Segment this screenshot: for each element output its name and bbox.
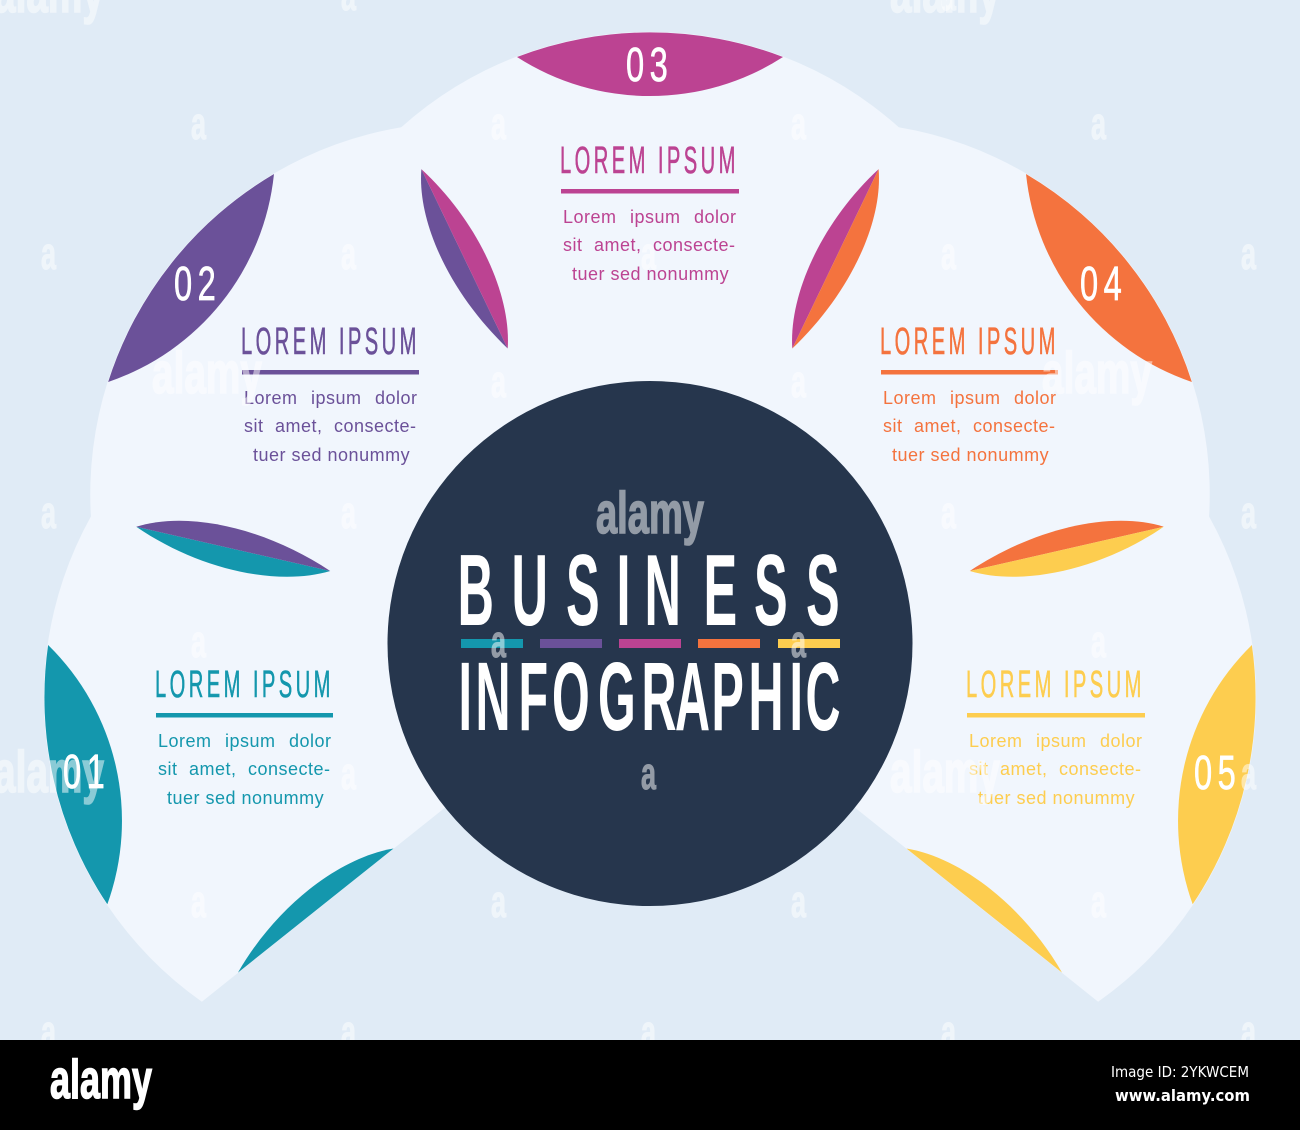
body text 02: amet, (275, 416, 323, 436)
watermarks: a (791, 876, 807, 927)
rule 02 (242, 370, 419, 374)
leaf: purple and magenta (403, 160, 526, 357)
body text 02: ipsum (311, 388, 362, 408)
watermarks: a (191, 98, 207, 149)
panel: step 05 (595, 401, 1300, 1023)
body text 03: sit (563, 235, 582, 255)
body text 05: sit (969, 759, 988, 779)
title (458, 534, 841, 752)
watermarks: a (191, 616, 207, 667)
body text 05: ipsum (1036, 731, 1087, 751)
watermarks: a (641, 748, 657, 799)
body text 04: tuer sed nonummy (892, 445, 1049, 465)
body text 04: amet, (914, 416, 962, 436)
website: www.alamy.com (1115, 1086, 1250, 1105)
petal 01 (0, 401, 705, 1023)
watermarks: a (41, 1006, 57, 1057)
heading 04: LOREM IPSUM (880, 320, 1059, 363)
leaf: magenta and orange (774, 160, 897, 357)
watermarks: a (1241, 1006, 1257, 1057)
watermarks: a (941, 487, 957, 538)
watermarks: a (1241, 228, 1257, 279)
body text 03: amet, (594, 235, 642, 255)
body text 01: ipsum (225, 731, 276, 751)
footer bar (0, 1040, 1300, 1130)
watermarks: a (1091, 98, 1107, 149)
body text 05: Lorem (969, 731, 1023, 751)
leaf: teal half bottom left (225, 832, 394, 973)
body text 02: dolor (375, 388, 418, 408)
panel: step 04 (495, 68, 1284, 839)
watermarks: a (341, 1006, 357, 1057)
watermarks: alamy (596, 481, 704, 546)
watermarks: a (791, 616, 807, 667)
body text 05: tuer sed nonummy (978, 788, 1135, 808)
colour bars (461, 639, 840, 648)
central circle (388, 381, 912, 906)
heading 02: LOREM IPSUM (241, 320, 420, 363)
watermarks: alamy (890, 740, 1000, 805)
watermarks: a (341, 748, 357, 799)
body text 05: amet, (1000, 759, 1048, 779)
title line: BUSINESS: BUSINESS (458, 534, 840, 647)
number 01: 01 (63, 745, 110, 799)
number 03: 03 (626, 38, 673, 92)
footer logo: alamy (50, 1048, 152, 1110)
heading 03: LOREM IPSUM (560, 139, 739, 182)
watermarks: a (1091, 616, 1107, 667)
heading 01: LOREM IPSUM (155, 663, 334, 706)
watermarks: a (491, 616, 507, 667)
leaf: purple and teal (132, 507, 335, 591)
petal 04 (495, 68, 1284, 839)
body text 03: tuer sed nonummy (572, 264, 729, 284)
title line: INFOGRAPHIC: INFOGRAPHIC (458, 644, 841, 752)
number leaf 02 (89, 159, 305, 406)
watermarks: a (41, 228, 57, 279)
watermarks: a (641, 228, 657, 279)
panel: step 01 (0, 401, 705, 1023)
number 04: 04 (1080, 257, 1127, 311)
body text 01: tuer sed nonummy (167, 788, 324, 808)
connector leaves (132, 160, 1168, 973)
rule 04 (881, 370, 1058, 374)
watermarks: a (1241, 487, 1257, 538)
body text 02: sit (244, 416, 264, 436)
panel: step 03 (401, 32, 899, 644)
watermarks: a (941, 228, 957, 279)
body text 04: ipsum (950, 388, 1001, 408)
body text 05: dolor (1100, 731, 1143, 751)
body text 02: Lorem (244, 388, 298, 408)
body text 01: sit (158, 759, 178, 779)
body text 03: consecte- (653, 235, 736, 255)
watermarks: a (491, 876, 507, 927)
body text 01: consecte- (248, 759, 331, 779)
leaf: orange and yellow (965, 507, 1168, 591)
watermarks: a (791, 356, 807, 407)
watermarks: a (341, 228, 357, 279)
watermarks: a (491, 98, 507, 149)
body text 01: dolor (289, 731, 332, 751)
number leaf 01 (24, 636, 145, 910)
panel: step 02 (16, 68, 805, 839)
watermarks: alamy (152, 341, 262, 406)
watermarks: alamy (1042, 341, 1152, 406)
body text 02: consecte- (334, 416, 417, 436)
rule 05 (967, 713, 1145, 718)
body text 03: dolor (694, 207, 737, 227)
petal 05 (595, 401, 1300, 1023)
leaf: yellow half bottom right (906, 832, 1075, 973)
body text 04: Lorem (883, 388, 937, 408)
body text 02: tuer sed nonummy (253, 445, 410, 465)
petal 03 (401, 32, 899, 644)
watermarks: a (941, 1006, 957, 1057)
body text 03: Lorem (563, 207, 617, 227)
rule 03 (561, 189, 739, 194)
body text 03: ipsum (630, 207, 681, 227)
watermarks: a (341, 487, 357, 538)
number 02: 02 (174, 257, 221, 311)
number 05: 05 (1194, 746, 1241, 800)
image id: Image ID: 2YKWCEM (1111, 1063, 1249, 1081)
petal 02 (16, 68, 805, 839)
watermarks: a (191, 876, 207, 927)
number leaf 04 (995, 159, 1211, 406)
body text 04: consecte- (973, 416, 1056, 436)
rule 01 (156, 713, 333, 718)
number leaf 03 (517, 32, 783, 96)
body text 01: Lorem (158, 731, 212, 751)
watermarks: a (1241, 748, 1257, 799)
watermarks: a (791, 98, 807, 149)
body text 04: sit (883, 416, 902, 436)
watermarks: a (491, 356, 507, 407)
body text 04: dolor (1014, 388, 1057, 408)
watermarks: a (1091, 876, 1107, 927)
heading 05: LOREM IPSUM (966, 663, 1145, 706)
number leaf 05 (1155, 636, 1276, 910)
watermarks: a (641, 1006, 657, 1057)
body text 05: consecte- (1059, 759, 1142, 779)
watermarks: a (41, 487, 57, 538)
body text 01: amet, (189, 759, 237, 779)
